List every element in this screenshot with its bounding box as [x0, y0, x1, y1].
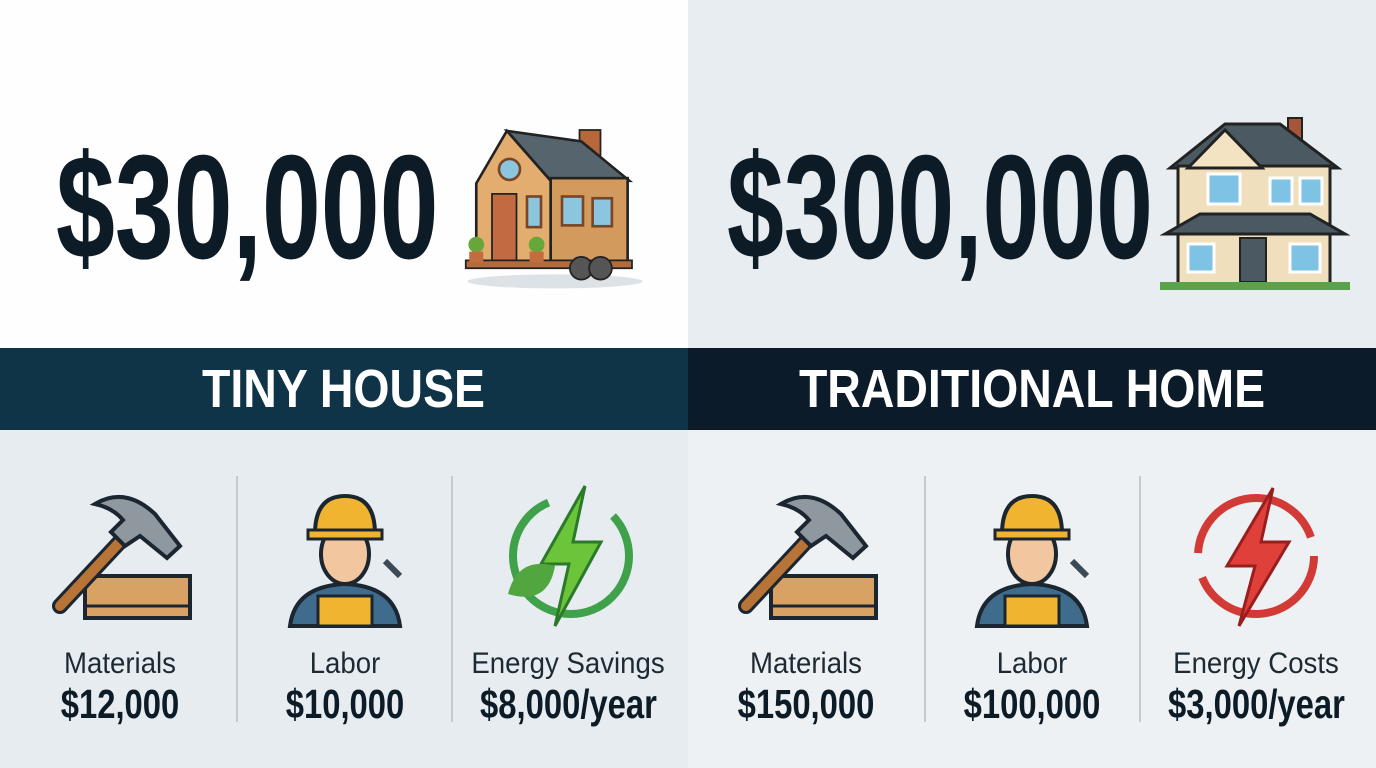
- traditional home price: $300,000: [727, 125, 1153, 290]
- icon: worker: [974, 494, 1090, 628]
- banner: tiny house: TINY HOUSE: [203, 359, 485, 419]
- left top panel: [0, 0, 688, 348]
- right top panel: [688, 0, 1376, 348]
- column: tiny labor: Labor: [310, 647, 380, 680]
- column: tiny materials: [52, 494, 192, 727]
- banner: traditional home: TRADITIONAL HOME: [799, 359, 1265, 419]
- column: traditional labor: Labor: [997, 647, 1067, 680]
- column: traditional materials: $150,000: [738, 681, 874, 727]
- column: tiny labor: $10,000: [286, 681, 404, 727]
- column: tiny labor: [286, 494, 404, 727]
- column: traditional labor: [964, 494, 1100, 727]
- icon: hammer and wood: [52, 494, 192, 620]
- column: tiny energy: [471, 485, 665, 727]
- banner: traditional home: [688, 348, 1376, 430]
- banner: tiny house: [0, 348, 688, 430]
- value: $12,000: [61, 681, 179, 727]
- column: traditional energy: [1168, 487, 1345, 727]
- column: tiny energy: $8,000/year: [480, 681, 657, 727]
- tiny house price: $30,000: [56, 125, 439, 290]
- icon: green energy: [508, 485, 633, 627]
- column: traditional labor: $100,000: [964, 681, 1100, 727]
- icon: traditional home: [1160, 117, 1350, 290]
- right bottom panel: [688, 430, 1376, 768]
- column: traditional energy: Energy Costs: [1173, 647, 1339, 680]
- column: tiny energy: Energy Savings: [471, 647, 665, 680]
- column: traditional materials: Materials: [750, 647, 862, 680]
- icon: red energy: [1194, 487, 1318, 627]
- left bottom panel: [0, 430, 688, 768]
- icon: hammer and wood: [738, 494, 878, 620]
- column: traditional materials: [738, 494, 878, 727]
- icon: worker: [288, 494, 402, 628]
- label: Materials: [64, 647, 176, 680]
- icon: tiny house: [464, 128, 642, 288]
- column: traditional energy: $3,000/year: [1168, 681, 1345, 727]
